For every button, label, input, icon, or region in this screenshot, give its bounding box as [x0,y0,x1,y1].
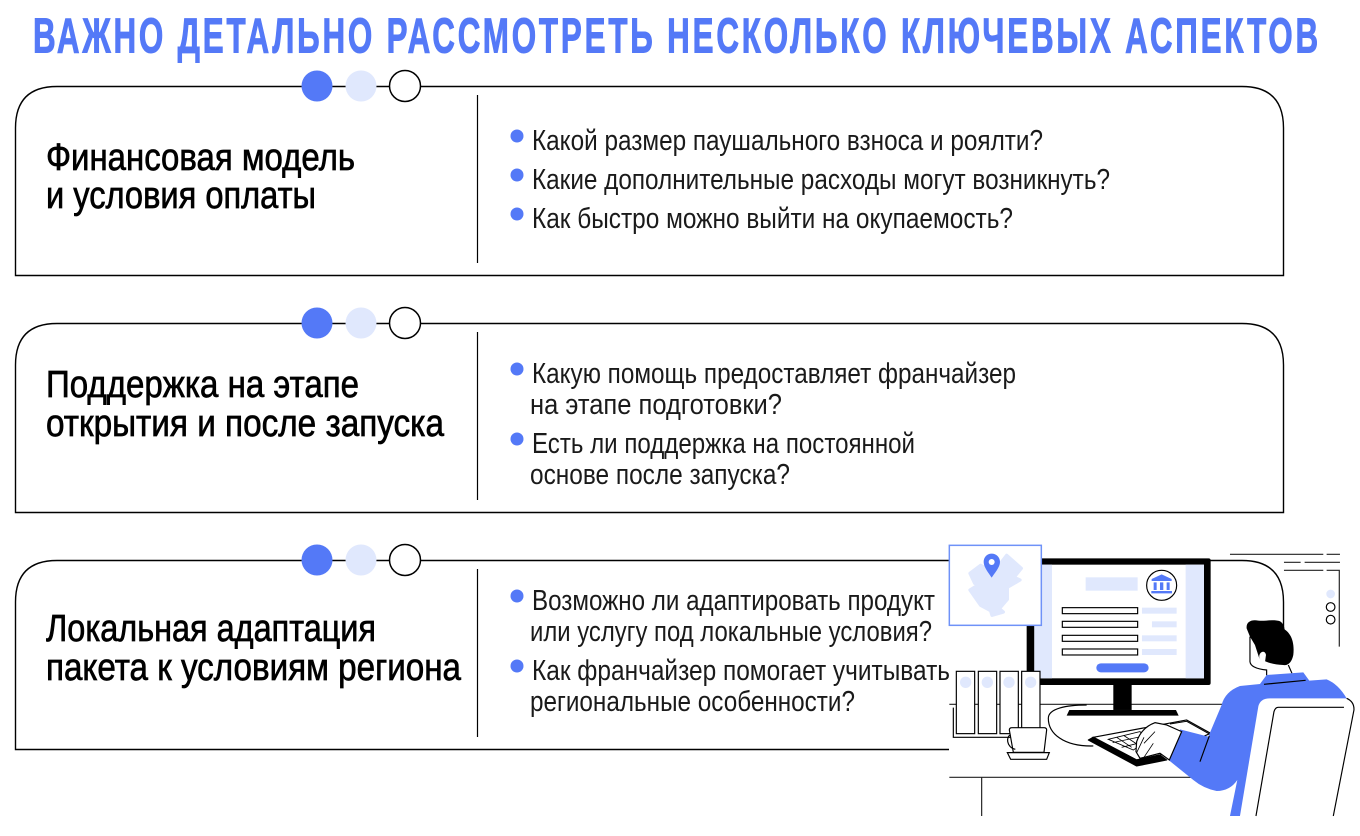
panel 3 step dots [302,544,420,576]
mouse cable [1048,705,1093,746]
panel 3 heading: пакета к условиям региона [46,647,462,689]
panel 1 questions [510,125,1110,235]
desk [949,704,1223,816]
panel 1 heading: Финансовая модель [46,137,355,179]
panel 3 questions: Возможно ли адаптировать продукт [532,585,935,617]
panel: financial model [16,70,1284,276]
panel: support [16,308,1284,512]
panel: local adaptation [16,544,1284,750]
panel 3 questions: Как франчайзер помогает учитывать [532,655,950,687]
panel 1 questions: Какой размер паушального взноса и роялти? [532,125,1043,157]
monitor [1027,558,1211,716]
keyboard [1088,720,1211,766]
panel 2 questions [510,358,1016,491]
person [1136,620,1347,816]
panel 2 questions: Есть ли поддержка на постоянной [532,428,915,460]
panel 2 questions: Какую помощь предоставляет франчайзер [532,358,1016,390]
binders on shelf [953,671,1040,737]
panel 3 heading: Локальная адаптация [46,608,376,650]
panel 2 heading [46,364,445,445]
panel 3 heading [46,608,462,689]
panel 1 step dots [302,70,420,102]
panel 1 questions: Как быстро можно выйти на окупаемость? [532,203,1013,235]
map card with pin [949,545,1041,625]
illustration: person at computer [949,545,1354,816]
panel 2 heading: Поддержка на этапе [46,364,359,406]
panel 2 step dots [302,308,420,338]
panel 1 heading: и условия оплаты [46,175,316,217]
panel 1 questions: Какие дополнительные расходы могут возникнуть? [532,164,1110,196]
panel 3 questions: региональные особенности? [530,686,855,718]
panel 3 questions [510,585,950,718]
panel 2 questions: основе после запуска? [530,459,790,491]
panel 2 heading: открытия и после запуска [46,403,445,445]
panel 1 heading [46,137,355,217]
panel 3 questions: или услугу под локальные условия? [530,616,932,648]
office chair [1240,698,1354,816]
panel 2 questions: на этапе подготовки? [530,389,782,421]
title: ВАЖНО ДЕТАЛЬНО РАССМОТРЕТЬ НЕСКОЛЬКО КЛЮЧЕВЫХ АСПЕКТОВ [33,8,1318,63]
coffee cup [1007,728,1049,759]
wall lines and switches [1230,554,1340,647]
